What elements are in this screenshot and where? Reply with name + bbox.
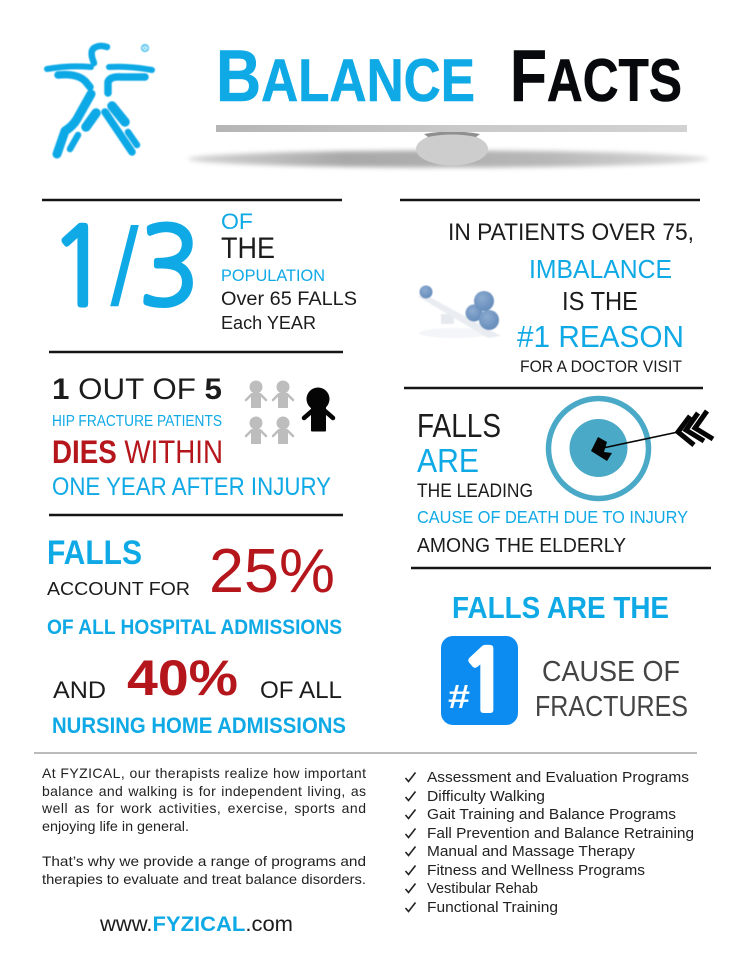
icon: seesaw with balls [417, 286, 501, 338]
panel: patients over 75: FOR A DOCTOR VISIT [520, 358, 682, 376]
text block: about FYZICAL: therapies to evaluate and treat balance disorders. [42, 871, 366, 887]
panel: falls hospital and nursing admissions: AND [53, 677, 106, 704]
list: programs [406, 769, 694, 916]
panel: falls hospital and nursing admissions: OF ALL [260, 677, 342, 704]
panel: one third statistic: POPULATION [221, 266, 325, 285]
text block: about FYZICAL: That’s why we provide a range of programs and [42, 853, 366, 869]
panel: falls leading cause of death: ARE [417, 442, 479, 479]
list: programs: Difficulty Walking [427, 788, 545, 805]
panel: falls hospital and nursing admissions: NURSING HOME ADMISSIONS [52, 713, 346, 738]
panel: falls leading cause of death: AMONG THE ELDERLY [417, 535, 626, 557]
panel: patients over 75: #1 REASON [517, 319, 684, 354]
panel: one third statistic: OF [221, 209, 253, 234]
list: programs: Functional Training [427, 899, 558, 916]
panel: one third statistic [49, 206, 357, 333]
panel: hip fracture statistic: HIP FRACTURE PATIENTS [52, 413, 222, 430]
panel: falls hospital and nursing admissions: 40% [127, 650, 238, 706]
logo: FYZICAL figure [47, 45, 152, 154]
panel: one third statistic: Each YEAR [221, 313, 316, 333]
icon: people one of five [246, 380, 333, 444]
list: programs: Assessment and Evaluation Programs [427, 769, 689, 786]
list: programs: Vestibular Rehab [427, 880, 538, 897]
panel: number one cause of fractures: FALLS ARE THE [452, 590, 669, 625]
list: programs: Fitness and Wellness Programs [427, 862, 645, 879]
panel: falls hospital and nursing admissions [47, 534, 346, 738]
panel: hip fracture statistic: DIES WITHIN [52, 434, 223, 470]
panel: falls leading cause of death: THE LEADING [417, 481, 533, 502]
panel: falls hospital and nursing admissions: OF ALL HOSPITAL ADMISSIONS [47, 616, 342, 639]
panel: number one cause of fractures: CAUSE OF [542, 656, 680, 688]
panel: hip fracture statistic [52, 373, 331, 501]
panel: falls hospital and nursing admissions: 25% [209, 537, 335, 606]
panel: patients over 75: IN PATIENTS OVER 75, [448, 219, 694, 246]
panel: number one cause of fractures: FRACTURES [535, 691, 688, 723]
panel: hip fracture statistic: 1 OUT OF 5 [52, 373, 222, 406]
title: Balance Facts: FACTS [510, 36, 682, 117]
panel: patients over 75: IS THE [562, 286, 638, 316]
panel: falls leading cause of death: CAUSE OF DEATH DUE TO INJURY [417, 507, 688, 527]
panel: falls leading cause of death [417, 407, 688, 557]
panel: one third statistic: THE [221, 232, 275, 265]
text block: about FYZICAL: enjoying life in general. [42, 818, 189, 834]
divider rules [34, 200, 711, 753]
panel: falls hospital and nursing admissions: ACCOUNT FOR [47, 579, 190, 599]
panel: hip fracture statistic: ONE YEAR AFTER INJURY [52, 473, 331, 501]
panel: one third statistic: 1/3 [49, 206, 200, 329]
panel: number one cause of fractures [441, 590, 688, 725]
title: Balance Facts [216, 36, 682, 117]
text block: about FYZICAL [41, 765, 366, 887]
text block: about FYZICAL: At FYZICAL, our therapists realize how important [42, 765, 366, 781]
text block: about FYZICAL: balance and walking is for independent living, as [42, 783, 366, 799]
icon: number one badge: # [448, 678, 470, 715]
text block: about FYZICAL: well as for work activities, exercise, sports and [41, 800, 366, 816]
list: programs: Gait Training and Balance Programs [427, 806, 676, 823]
panel: falls leading cause of death: FALLS [417, 407, 501, 444]
panel: one third statistic: Over 65 FALLS [221, 289, 357, 310]
list: programs: Manual and Massage Therapy [427, 843, 636, 860]
illustration: balance board [188, 125, 708, 168]
list: programs: Fall Prevention and Balance Retraining [427, 825, 694, 842]
panel: patients over 75 [448, 219, 694, 376]
icon: number one badge: 1 [460, 640, 510, 724]
title: Balance Facts: BALANCE [216, 36, 475, 117]
icon: number one badge [441, 636, 518, 725]
icon: target and arrow [548, 398, 713, 498]
logo: FYZICAL figure: R [143, 46, 147, 52]
panel: patients over 75: IMBALANCE [529, 254, 672, 284]
panel: falls hospital and nursing admissions: FALLS [47, 534, 142, 572]
website address: www.FYZICAL.com [99, 913, 293, 936]
